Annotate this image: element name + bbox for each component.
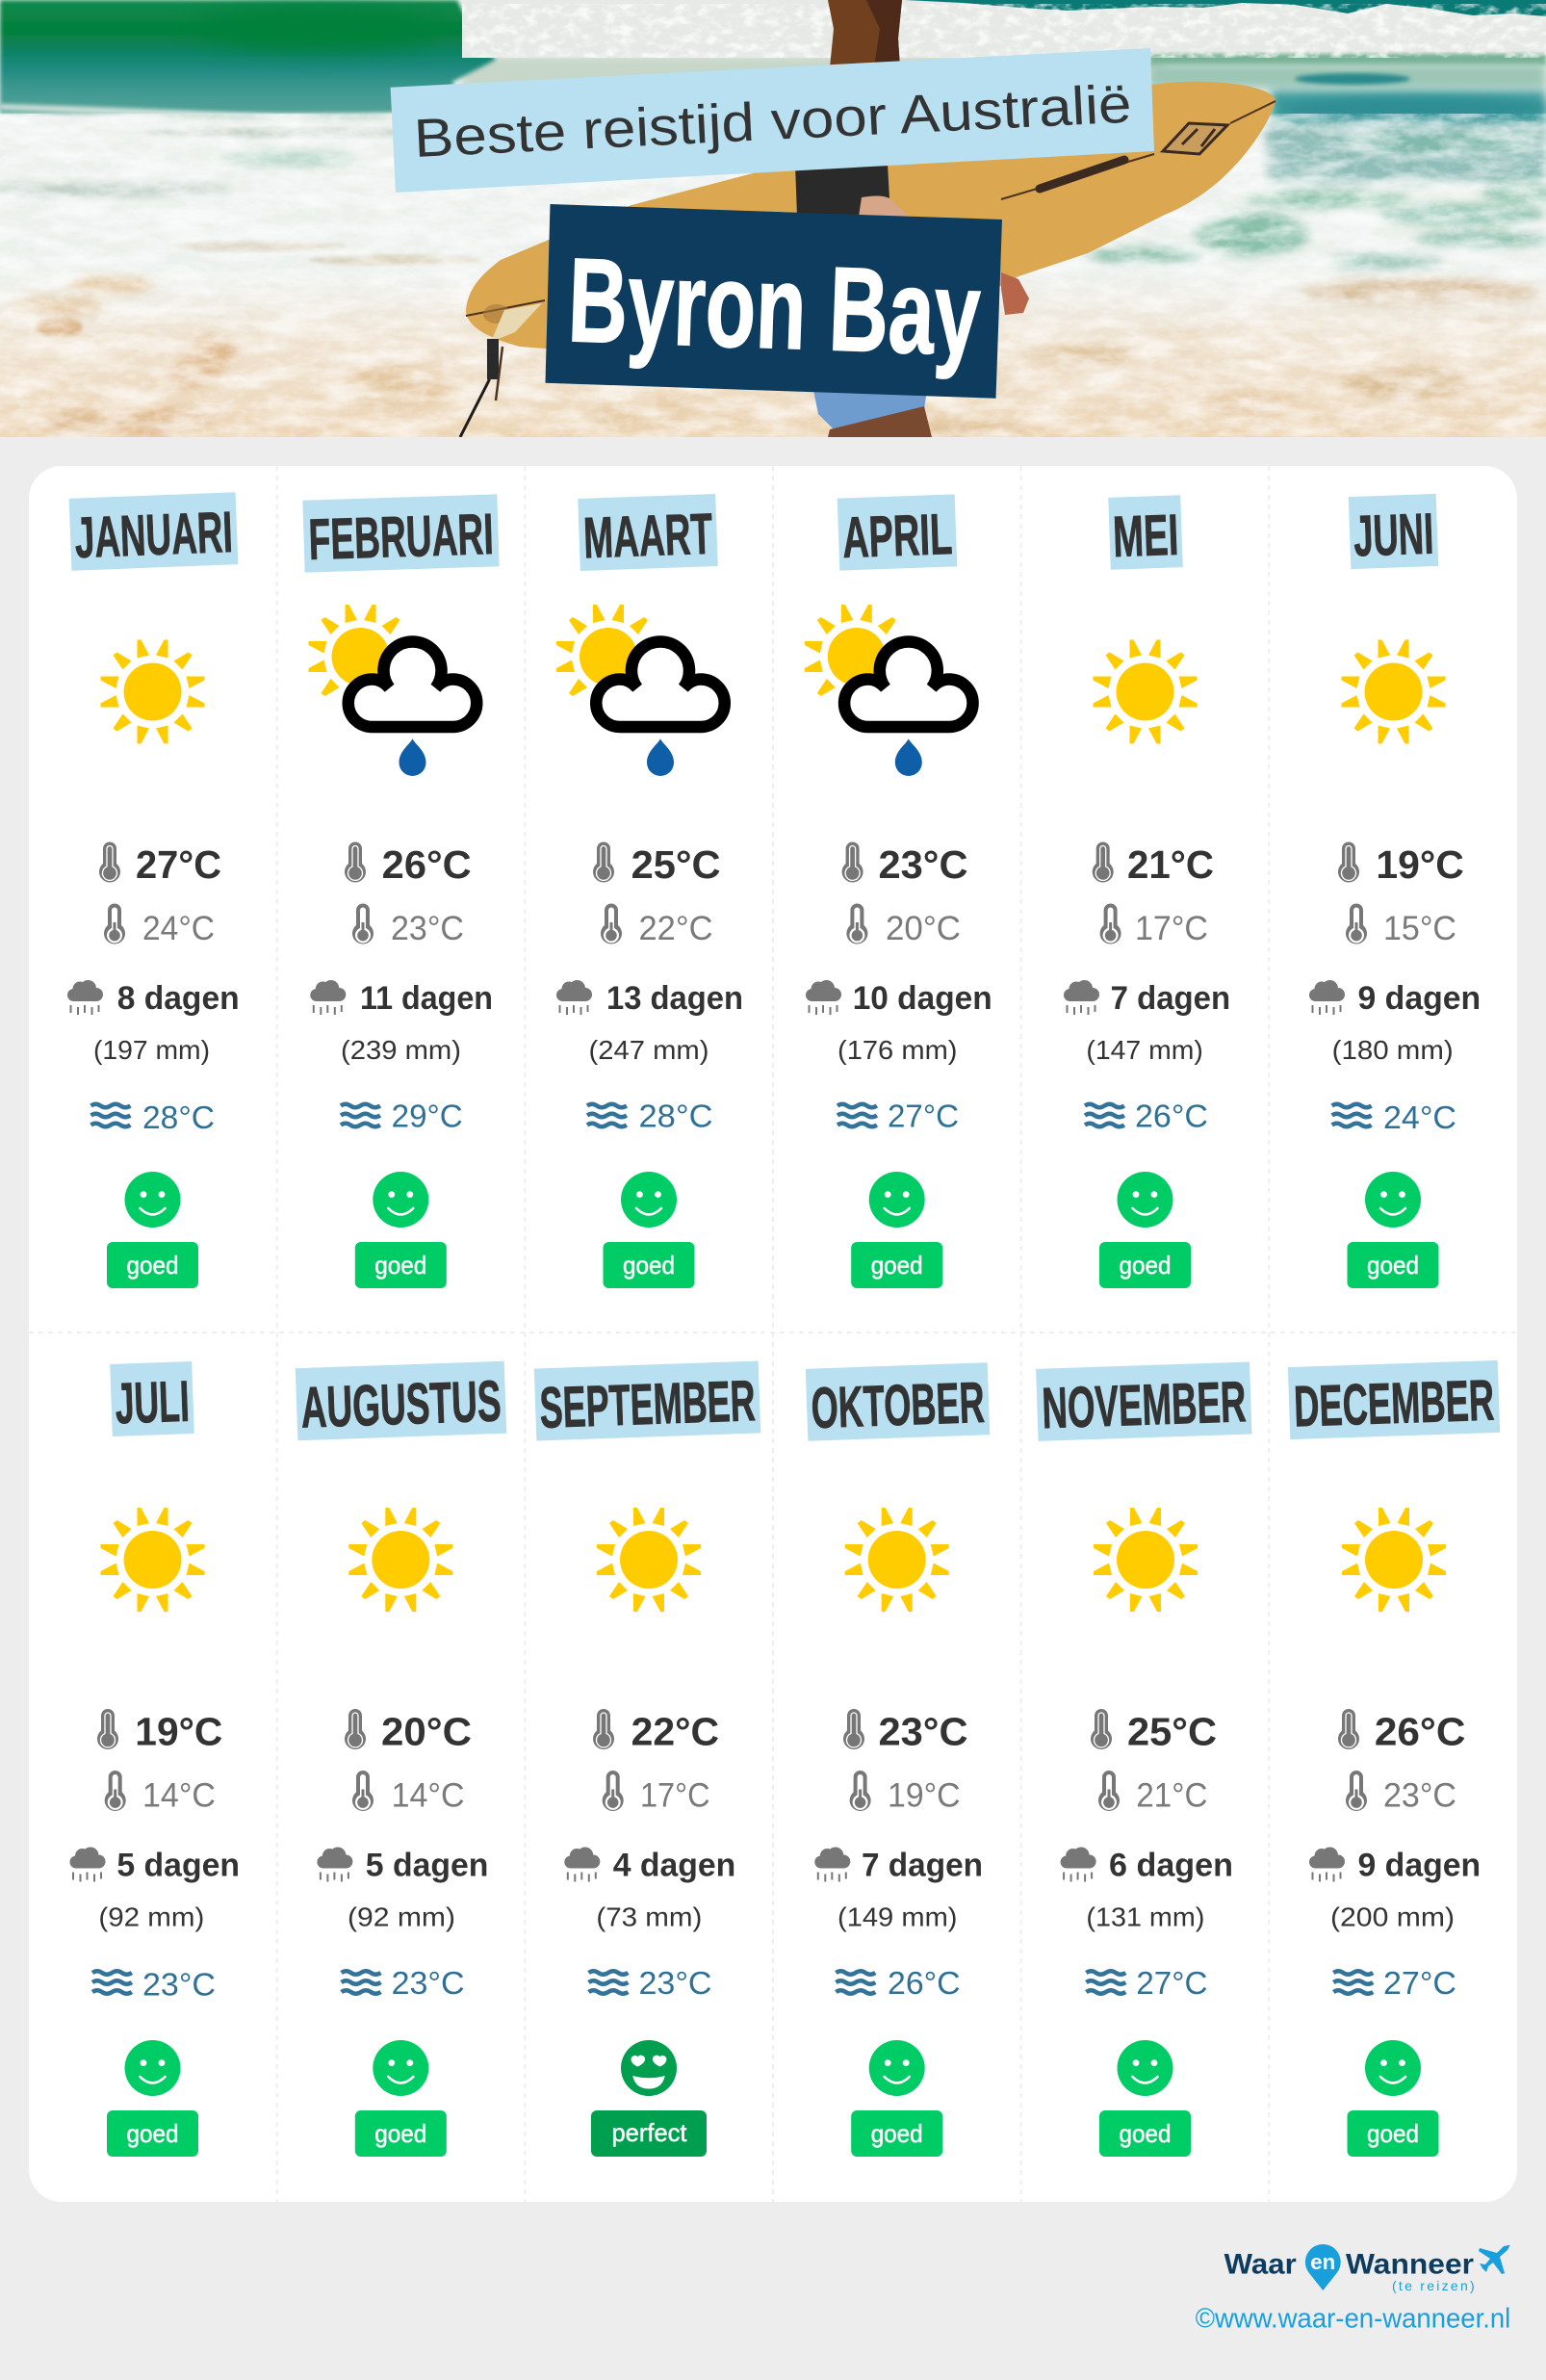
surfer torso and arm	[795, 164, 890, 217]
panel: september	[534, 1360, 760, 2157]
month heading: MEI	[1112, 503, 1179, 569]
title banner: Byron Bay	[545, 204, 1002, 399]
month heading	[296, 1361, 506, 1440]
rating badge	[1099, 1242, 1191, 1288]
rating badge: goed	[871, 2119, 923, 2148]
min temperature	[601, 903, 712, 947]
icon: sun	[100, 1508, 204, 1612]
min temperature: 17°C	[640, 1777, 710, 1814]
sea temperature: 27°C	[888, 1098, 959, 1134]
max temperature: 20°C	[381, 1710, 472, 1754]
sea temperature	[342, 1965, 465, 2001]
sea temperature	[341, 1098, 463, 1134]
max temperature: 27°C	[136, 842, 221, 887]
panel: mei	[1064, 495, 1230, 1288]
sea temperature	[92, 1966, 216, 2003]
max temperature: 23°C	[878, 842, 968, 887]
min temperature: 23°C	[391, 910, 464, 947]
title banner: Beste reistijd voor Australië: Beste reistijd voor Australië	[413, 73, 1133, 168]
rain days: 7 dagen	[1111, 980, 1230, 1017]
rain days: 8 dagen	[117, 980, 240, 1017]
rating badge: perfect	[612, 2118, 687, 2147]
rain days: 5 dagen	[116, 1847, 240, 1883]
rainfall: (92 mm)	[98, 1902, 204, 1931]
rainfall: (176 mm)	[837, 1035, 957, 1065]
rating badge	[355, 2110, 447, 2157]
rainfall: (131 mm)	[1086, 1902, 1204, 1931]
rating badge: goed	[374, 1251, 426, 1280]
leash	[458, 379, 491, 437]
icon: smiley	[869, 1172, 925, 1228]
rating badge	[1348, 2110, 1438, 2157]
max temperature	[1093, 841, 1214, 887]
icon: sun	[1342, 1508, 1446, 1612]
title banner: Byron Bay: Byron Bay	[566, 234, 983, 381]
month heading: FEBRUARI	[308, 502, 495, 572]
month heading	[302, 494, 500, 573]
month heading	[837, 494, 957, 571]
rating badge	[851, 2110, 942, 2157]
icon: smiley	[1365, 1172, 1421, 1228]
rating badge	[603, 1242, 695, 1288]
title banner: Beste reistijd voor Australië	[391, 48, 1154, 193]
max temperature	[1091, 1709, 1217, 1754]
min temperature: 14°C	[392, 1777, 465, 1814]
rating badge: goed	[127, 2119, 179, 2148]
month heading	[578, 494, 718, 571]
min temperature	[1346, 903, 1456, 947]
icon: sun	[348, 1508, 452, 1612]
rainfall: (180 mm)	[1332, 1035, 1454, 1065]
sea temperature: 28°C	[142, 1099, 215, 1135]
panel: maart	[556, 494, 743, 1288]
rainfall: (73 mm)	[596, 1902, 702, 1931]
sea temperature: 26°C	[888, 1965, 961, 2001]
rain days	[310, 980, 493, 1017]
max temperature	[1338, 841, 1464, 887]
logo: Waar en Wanneer: (te reizen)	[1392, 2278, 1475, 2293]
icon: sun behind rain cloud	[805, 605, 973, 776]
month heading: JANUARI	[73, 500, 234, 570]
panel: augustus	[296, 1361, 506, 2157]
sea temperature	[1085, 1098, 1208, 1134]
rating badge: goed	[1367, 2119, 1419, 2148]
rain days: 5 dagen	[366, 1847, 488, 1883]
icon: smiley	[1117, 2040, 1172, 2096]
max temperature: 19°C	[1376, 842, 1464, 887]
rating badge: goed	[623, 1251, 675, 1280]
min temperature: 23°C	[1383, 1777, 1456, 1814]
surfer neck	[828, 0, 902, 67]
rain days: 7 dagen	[862, 1847, 983, 1883]
icon: smiley	[373, 1172, 428, 1228]
icon: map pin	[1305, 2244, 1341, 2290]
sea temperature	[1086, 1965, 1207, 2001]
rating badge	[107, 2110, 198, 2157]
max temperature	[842, 841, 968, 887]
icon: heart-eyes smiley	[621, 2040, 677, 2096]
rain days: 11 dagen	[360, 980, 493, 1017]
min temperature	[1098, 1771, 1207, 1814]
min temperature	[850, 1771, 961, 1814]
panel: juli	[69, 1361, 240, 2157]
icon: sun	[597, 1508, 701, 1612]
month heading: AUGUSTUS	[300, 1368, 502, 1440]
month heading	[1349, 494, 1438, 569]
max temperature: 19°C	[135, 1710, 222, 1754]
panel: month calendar card	[29, 466, 1517, 2202]
panel: oktober	[806, 1362, 990, 2157]
max temperature	[97, 1709, 222, 1754]
sea temperature	[1332, 1099, 1456, 1135]
month heading	[1108, 495, 1183, 570]
panel: november	[1036, 1362, 1251, 2157]
panel: juni	[1309, 494, 1481, 1288]
icon: sun	[845, 1508, 949, 1612]
min temperature	[105, 1771, 216, 1814]
min temperature	[352, 1771, 465, 1814]
icon: smiley	[621, 1172, 677, 1228]
rating badge: goed	[871, 1251, 923, 1280]
max temperature	[345, 841, 472, 887]
sea temperature: 27°C	[1136, 1965, 1207, 2001]
min temperature	[1346, 1771, 1456, 1814]
month heading	[1036, 1362, 1251, 1441]
rating badge	[107, 1242, 198, 1288]
icon: smiley	[125, 1172, 181, 1228]
surfboard fin	[493, 303, 542, 339]
month heading: OKTOBER	[811, 1370, 986, 1440]
rain days: 13 dagen	[606, 980, 743, 1017]
sea temperature: 27°C	[1383, 1965, 1456, 2001]
min temperature: 22°C	[639, 910, 712, 947]
max temperature: 23°C	[878, 1710, 968, 1754]
rainfall: (92 mm)	[348, 1902, 455, 1931]
min temperature: 21°C	[1136, 1777, 1207, 1814]
icon: sun	[1094, 639, 1198, 743]
icon: map pin: en	[1310, 2250, 1335, 2274]
surfboard	[466, 82, 1275, 349]
panel: april	[805, 494, 992, 1288]
rain days: 10 dagen	[853, 980, 992, 1017]
min temperature	[104, 903, 215, 947]
rating badge	[1348, 1242, 1438, 1288]
min temperature	[1100, 903, 1208, 947]
rating badge: goed	[1119, 2119, 1171, 2148]
sea temperature: 26°C	[1135, 1098, 1208, 1134]
panel: februari	[302, 494, 500, 1288]
icon: sun behind rain cloud	[556, 605, 725, 776]
sea temperature: 28°C	[639, 1098, 712, 1134]
min temperature: 14°C	[142, 1777, 216, 1814]
max temperature: 25°C	[631, 842, 721, 887]
rating badge: goed	[374, 2119, 426, 2148]
month heading	[110, 1361, 194, 1436]
rating badge: goed	[127, 1251, 179, 1280]
rainfall: (197 mm)	[93, 1035, 210, 1065]
month heading: JULI	[114, 1369, 191, 1436]
icon: smiley	[373, 2040, 428, 2096]
icon: smiley	[1117, 1172, 1172, 1228]
min temperature	[846, 903, 961, 947]
month heading: NOVEMBER	[1041, 1369, 1247, 1440]
sea temperature	[836, 1965, 961, 2001]
month heading: JUNI	[1353, 502, 1434, 568]
sea temperature	[90, 1099, 215, 1135]
sea temperature: 29°C	[392, 1098, 463, 1134]
surfer hand	[1001, 272, 1029, 315]
rating badge	[1099, 2110, 1191, 2157]
sea temperature	[1333, 1965, 1456, 2001]
icon: airplane	[1479, 2245, 1510, 2274]
logo: Waar en Wanneer: Wanneer	[1346, 2249, 1474, 2281]
min temperature: 17°C	[1135, 910, 1208, 947]
sea temperature: 23°C	[392, 1965, 465, 2001]
min temperature: 20°C	[886, 910, 961, 947]
sea temperature	[589, 1965, 712, 2001]
month heading	[806, 1362, 990, 1441]
max temperature	[593, 1709, 719, 1754]
month heading	[534, 1360, 760, 1441]
rainfall: (149 mm)	[837, 1902, 957, 1931]
panel: januari	[67, 492, 240, 1288]
max temperature: 26°C	[1375, 1710, 1465, 1754]
logo: Waar en Wanneer: Waar	[1224, 2249, 1297, 2281]
panel: december	[1288, 1360, 1500, 2157]
footer url: ©www.waar-en-wanneer.nl	[1196, 2304, 1510, 2335]
max temperature: 25°C	[1127, 1710, 1217, 1754]
rating badge: goed	[1119, 1251, 1171, 1280]
min temperature: 24°C	[142, 910, 215, 947]
hero photo: surfer on the beach	[0, 0, 1546, 437]
max temperature: 22°C	[631, 1710, 719, 1754]
rainfall: (147 mm)	[1086, 1035, 1203, 1065]
rating badge	[851, 1242, 942, 1288]
rain days: 9 dagen	[1357, 1847, 1481, 1883]
max temperature	[593, 841, 721, 887]
month heading: SEPTEMBER	[539, 1368, 757, 1440]
sea temperature: 23°C	[142, 1966, 216, 2003]
rainfall: (200 mm)	[1330, 1902, 1455, 1931]
icon: smiley	[869, 2040, 925, 2096]
max temperature: 26°C	[382, 842, 472, 887]
logo: Waar en Wanneer	[1224, 2244, 1510, 2293]
max temperature	[99, 841, 221, 887]
rain days: 4 dagen	[613, 1847, 735, 1883]
rating badge	[591, 2110, 707, 2157]
sea temperature: 24°C	[1383, 1099, 1456, 1135]
month heading	[69, 492, 238, 571]
max temperature	[1338, 1709, 1465, 1754]
icon: smiley	[125, 2040, 181, 2096]
icon: sun	[1094, 1508, 1198, 1612]
rain days: 6 dagen	[1109, 1847, 1233, 1883]
rainfall: (239 mm)	[341, 1035, 461, 1065]
min temperature: 15°C	[1383, 910, 1456, 947]
min temperature	[603, 1771, 710, 1814]
month heading: MAART	[582, 502, 713, 570]
min temperature	[352, 903, 464, 947]
sea temperature: 23°C	[639, 1965, 712, 2001]
min temperature: 19°C	[888, 1777, 961, 1814]
max temperature	[345, 1709, 472, 1754]
rain days: 9 dagen	[1357, 980, 1481, 1017]
sea temperature	[587, 1098, 712, 1134]
month heading: APRIL	[841, 502, 953, 570]
icon: sun behind rain cloud	[308, 605, 477, 776]
max temperature: 21°C	[1127, 842, 1214, 887]
rainfall: (247 mm)	[589, 1035, 709, 1065]
icon: sun	[100, 639, 204, 743]
icon: smiley	[1365, 2040, 1421, 2096]
rating badge	[355, 1242, 447, 1288]
sea temperature	[837, 1098, 959, 1134]
surfer shorts and legs	[814, 392, 926, 429]
max temperature	[843, 1709, 968, 1754]
rating badge: goed	[1367, 1251, 1419, 1280]
icon: sun	[1342, 639, 1446, 743]
